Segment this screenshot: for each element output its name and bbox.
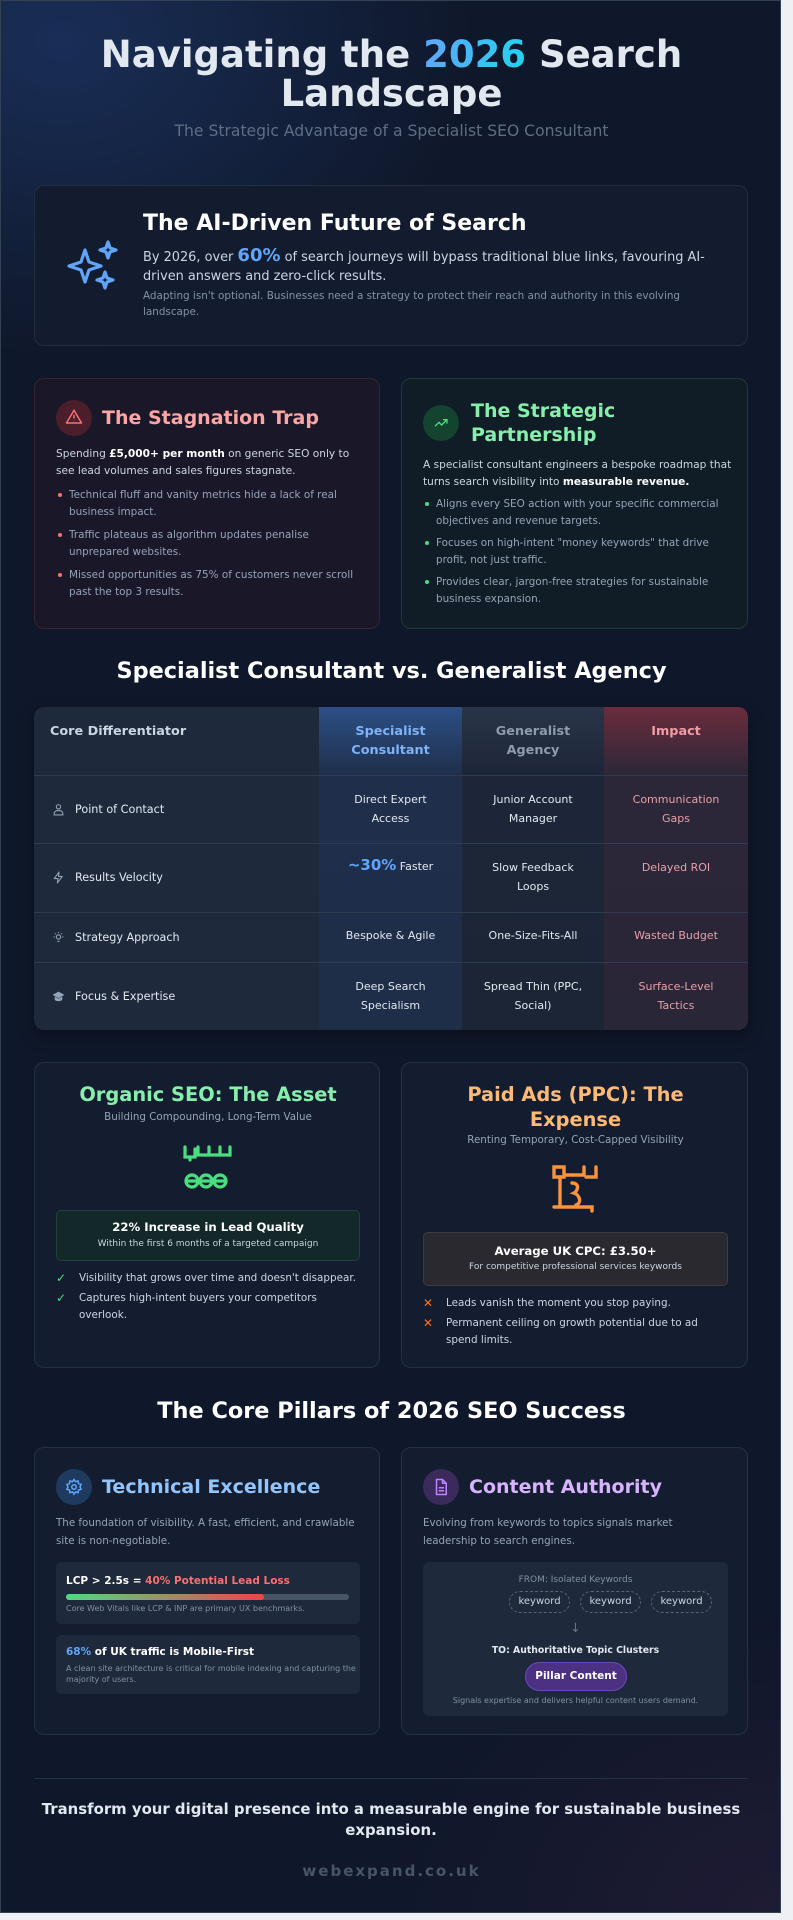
- stat: mobile: A clean site architecture is critical for mobile indexing and capturing the majority of users.: [66, 1664, 356, 1684]
- description: The foundation of visibility. A fast, efficient, and crawlable site is non-negotiable.: [56, 1517, 355, 1547]
- row: focus & expertise: Surface-Level: [639, 980, 713, 993]
- row: point of contact: Point of Contact: [75, 802, 164, 816]
- bullet list: [425, 498, 719, 604]
- check list: ✓: [56, 1271, 66, 1285]
- stat box: [423, 1232, 728, 1286]
- cross list: Leads vanish the moment you stop paying.: [446, 1297, 671, 1309]
- heading: [471, 400, 615, 446]
- table header: Core Differentiator: [50, 724, 186, 739]
- row: focus & expertise: Focus & Expertise: [75, 990, 175, 1002]
- bullet list: Traffic plateaus as algorithm updates penalise unprepared websites.: [69, 529, 309, 558]
- stat box: [56, 1210, 360, 1261]
- stat box: 22% Increase in Lead Quality: [112, 1220, 304, 1234]
- heading: pillars: The Core Pillars of 2026 SEO Success: [157, 1398, 626, 1424]
- description: Evolving from keywords to topics signals market leadership to search engines.: [423, 1517, 673, 1547]
- title: Landscape: [281, 72, 502, 115]
- row: strategy approach: Wasted Budget: [634, 929, 718, 942]
- icon: growth: [183, 1145, 232, 1189]
- check list: Captures high-intent buyers your competitors overlook.: [79, 1292, 317, 1320]
- row: focus & expertise: Social): [515, 999, 551, 1012]
- stat box: Within the first 6 months of a targeted campaign: [98, 1239, 318, 1249]
- table header: Impact: [651, 724, 701, 739]
- heading: The Strategic: [471, 400, 615, 422]
- row: results velocity: Results Velocity: [75, 871, 163, 884]
- cross list: Permanent ceiling on growth potential due to ad spend limits.: [446, 1317, 698, 1346]
- heading: comparison: Specialist Consultant vs. Generalist Agency: [116, 658, 667, 684]
- row: results velocity: [54, 856, 710, 893]
- heading: Organic SEO: The Asset: [79, 1083, 337, 1106]
- row: focus & expertise: Specialism: [361, 999, 420, 1012]
- row: focus & expertise: Spread Thin (PPC,: [484, 980, 582, 993]
- diagram: keywords to clusters: TO: Authoritative Topic Clusters: [492, 1645, 659, 1656]
- row: focus & expertise: Deep Search: [355, 980, 426, 993]
- row: results velocity: ~30% Faster: [348, 856, 433, 874]
- diagram: keywords to clusters: FROM: Isolated Keywords: [519, 1575, 632, 1585]
- bullet list: Missed opportunities as 75% of customers never scroll past the top 3 results.: [69, 569, 353, 598]
- diagram: keywords to clusters: keyword: [589, 1596, 632, 1607]
- row: point of contact: Junior Account: [493, 793, 573, 806]
- bullet list: Provides clear, jargon-free strategies for sustainable business expansion.: [436, 576, 708, 604]
- heading: The AI-Driven Future of Search: [143, 211, 527, 236]
- stat: LCP: LCP > 2.5s = 40% Potential Lead Loss: [66, 1575, 290, 1587]
- diagram: keywords to clusters: [423, 1562, 728, 1716]
- check list: Visibility that grows over time and doesn't disappear.: [79, 1272, 356, 1284]
- icon: sparkles: [67, 240, 118, 290]
- intro: Spending £5,000+ per month on generic SEO only to see lead volumes and sales figures stagnate.: [56, 448, 349, 476]
- row: point of contact: Communication: [633, 793, 719, 806]
- row: point of contact: Manager: [509, 812, 557, 825]
- diagram: keywords to clusters: keyword: [660, 1596, 703, 1607]
- subtitle: Building Compounding, Long-Term Value: [104, 1111, 312, 1123]
- icon: trend: [423, 405, 459, 441]
- heading: Partnership: [471, 424, 596, 446]
- progress bar: [66, 1594, 349, 1600]
- diagram: keywords to clusters: Signals expertise and delivers helpful content users demand.: [453, 1696, 698, 1705]
- check list: [56, 1271, 356, 1320]
- row: strategy approach: [54, 929, 718, 944]
- bullet list: [58, 489, 353, 598]
- table header: Consultant: [351, 743, 430, 758]
- heading: Technical Excellence: [102, 1476, 320, 1498]
- title: [101, 33, 682, 115]
- panel: paid ads: [401, 1062, 748, 1368]
- panel: stagnation trap: [34, 378, 380, 629]
- icon: warning: [56, 400, 92, 436]
- panel: strategic partnership: [401, 378, 748, 629]
- heading: Content Authority: [469, 1476, 662, 1498]
- title: Navigating the 2026 Search: [101, 33, 682, 76]
- panel: organic SEO: [34, 1062, 380, 1368]
- subtitle: Renting Temporary, Cost-Capped Visibility: [467, 1134, 684, 1146]
- subtitle: The Strategic Advantage of a Specialist SEO Consultant: [174, 122, 608, 140]
- stat: mobile: 68% of UK traffic is Mobile-First: [66, 1646, 254, 1658]
- text block: By 2026, over 60% of search journeys will bypass traditional blue links, favouring AI-driven answers and zero-click results.: [143, 245, 705, 284]
- heading: [467, 1083, 684, 1131]
- row: point of contact: [54, 793, 719, 825]
- row: strategy approach: Bespoke & Agile: [346, 929, 435, 942]
- comparison table: [34, 707, 748, 1030]
- heading: The Stagnation Trap: [102, 407, 319, 429]
- cross list: ✕: [423, 1316, 433, 1330]
- row: strategy approach: Strategy Approach: [75, 930, 180, 944]
- stat box: Average UK CPC: £3.50+: [494, 1244, 657, 1258]
- heading: Paid Ads (PPC): The: [467, 1083, 684, 1106]
- heading: Expense: [530, 1108, 621, 1131]
- bullet list: Technical fluff and vanity metrics hide a lack of real business impact.: [69, 489, 337, 518]
- row: point of contact: Direct Expert: [354, 793, 427, 806]
- stat box: For competitive professional services keywords: [469, 1262, 682, 1272]
- row: point of contact: Gaps: [662, 812, 690, 825]
- intro: A specialist consultant engineers a bespoke roadmap that turns search visibility into measurable revenue.: [423, 459, 731, 488]
- row: strategy approach: One-Size-Fits-All: [489, 929, 577, 942]
- row: results velocity: Delayed ROI: [642, 861, 710, 874]
- row: focus & expertise: Tactics: [658, 999, 694, 1012]
- table header: Agency: [507, 743, 559, 758]
- footer brand: webexpand.co.uk: [302, 1862, 481, 1880]
- cross list: ✕: [423, 1296, 433, 1310]
- stat: LCP: [56, 1562, 360, 1624]
- bullet list: Aligns every SEO action with your specific commercial objectives and revenue targets.: [436, 498, 719, 526]
- closing statement: Transform your digital presence into a measurable engine for sustainable business expansion.: [42, 1800, 740, 1839]
- stat: mobile: [56, 1635, 360, 1694]
- diagram: keywords to clusters: Pillar Content: [535, 1670, 617, 1682]
- row: results velocity: Loops: [517, 880, 549, 893]
- row: point of contact: Access: [372, 812, 409, 825]
- icon: expense: [552, 1165, 598, 1213]
- panel: content authority: [401, 1447, 748, 1735]
- arrow: ↓: [570, 1621, 581, 1636]
- stat: LCP: Core Web Vitals like LCP & INP are primary UX benchmarks.: [66, 1604, 305, 1613]
- table header: Generalist: [496, 724, 570, 739]
- row: results velocity: Slow Feedback: [492, 861, 574, 874]
- panel: technical excellence: [34, 1447, 380, 1735]
- cross list: [423, 1296, 698, 1346]
- panel: AI-driven future: [34, 185, 748, 346]
- icon: document: [423, 1469, 459, 1505]
- row: focus & expertise: [52, 980, 713, 1012]
- table header: [50, 724, 701, 758]
- table header: Specialist: [355, 724, 426, 739]
- note: Adapting isn't optional. Businesses need a strategy to protect their reach and authority in this evolving landscape.: [143, 290, 680, 318]
- diagram: keywords to clusters: keyword: [518, 1596, 561, 1607]
- check list: ✓: [56, 1291, 66, 1305]
- icon: gear: [56, 1469, 92, 1505]
- bullet list: Focuses on high-intent "money keywords" that drive profit, not just traffic.: [436, 537, 709, 566]
